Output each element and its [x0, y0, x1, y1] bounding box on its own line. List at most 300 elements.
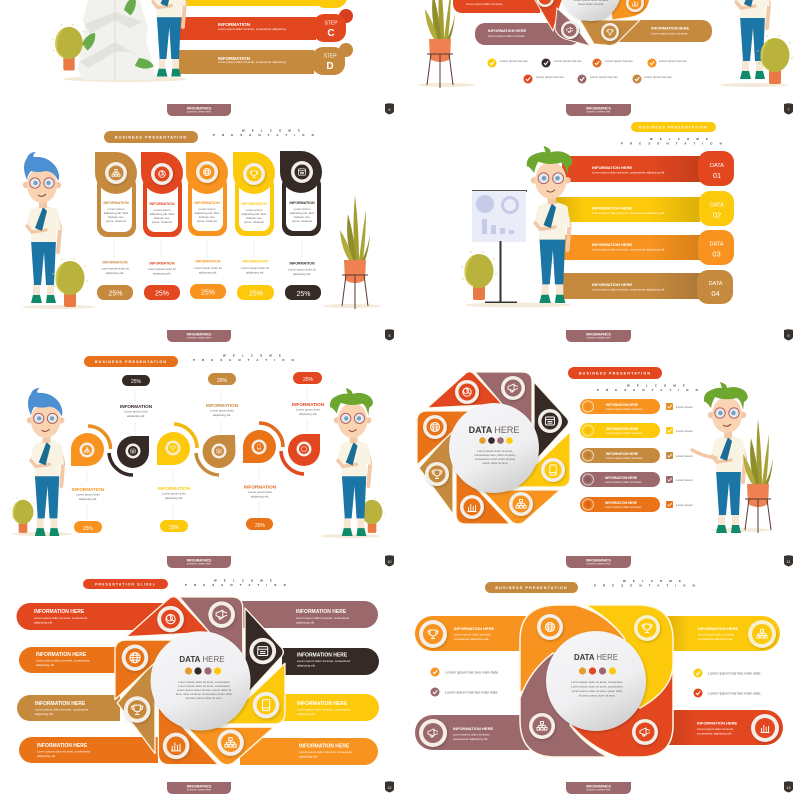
page numbers: 8 [389, 334, 391, 338]
welcome title [594, 579, 702, 588]
row 4 [580, 472, 693, 487]
row 2 [580, 423, 693, 438]
info brown [206, 403, 239, 417]
floor shadow [711, 528, 771, 532]
stat dark: INFORMATION [289, 262, 315, 266]
checklist: Lorem Ipsum has two main data [708, 692, 761, 696]
bar orange: consectetur adipiscing elit. [454, 637, 489, 641]
bar orange right: adipiscing elit. [299, 754, 318, 758]
info step D: Lorem ipsum dolor sit amet, consectetur adipiscing [218, 60, 286, 64]
data row 03 [560, 230, 734, 265]
welcome title: WELCOME [223, 354, 288, 358]
card brown: adipiscing elit. Duis [104, 211, 129, 215]
checklist: Lorem Ipsum has two [500, 59, 528, 63]
checklist [430, 668, 761, 698]
stat dark: adipiscing elit. [293, 272, 311, 276]
card dark: Lorem ipsum [294, 207, 311, 211]
badge step D [312, 43, 353, 75]
bar yellow: consectetur adipiscing elit. [698, 637, 733, 641]
badge step C: STEP [324, 20, 338, 26]
row 4: Lorem ipsum [676, 478, 693, 482]
floor shadow [63, 76, 187, 82]
data row 02: Lorem ipsum dolor sit amet, consectetur adipiscing elit. [592, 211, 665, 215]
bar icon mega [419, 719, 447, 747]
info yellow: adipiscing elit. [165, 496, 183, 500]
card brown: Lorem ipsum [108, 207, 125, 211]
icon: globe [537, 614, 563, 640]
bar orange: adipiscing elit. [36, 663, 55, 667]
drop red [281, 434, 320, 474]
footer tabs: BUSINESS COMPANY HERE [187, 110, 212, 114]
data row 02: INFORMATION HERE [592, 206, 632, 210]
bar orange: INFORMATION HERE [36, 652, 87, 658]
info brown: Lorem ipsum dolor [210, 408, 234, 412]
bar brown: adipiscing elit. [35, 712, 54, 716]
data row 01: DATA [710, 163, 724, 169]
badge step C [313, 9, 353, 42]
bar red: Lorem ipsum dolor sit amet, consectetur [34, 616, 87, 620]
bar yellow [282, 694, 379, 721]
bar orange: Lorem ipsum dolor sit amet, consectetur [36, 658, 89, 662]
stat orange: INFORMATION [195, 260, 221, 264]
disc text: ipsum dolor sit ama. [578, 2, 604, 6]
icon: trophy [634, 615, 660, 641]
info red: Lorem ipsum dolor [296, 408, 320, 412]
bar mauve: adipiscing elit. [296, 620, 315, 624]
drop dark [109, 436, 149, 475]
info step C: Lorem ipsum dolor sit amet, consectetur adipiscing [218, 27, 286, 31]
card yellow: Lorem ipsum [246, 208, 263, 212]
info step D: INFORMATION [218, 56, 251, 61]
central disc [546, 631, 646, 731]
icon: mega [632, 719, 658, 745]
info yellow [158, 486, 191, 500]
footer tabs: BUSINESS COMPANY HERE [586, 562, 611, 566]
drop yellow [157, 424, 197, 465]
page numbers: 12 [388, 786, 391, 790]
info orange: Lorem ipsum dolor [76, 492, 100, 496]
bar red [660, 710, 783, 745]
disc text: DATA HERE [179, 655, 225, 664]
footer tabs: INFOGRAPHICS [187, 332, 211, 336]
plant on stand [340, 195, 370, 309]
card orange: purus. Vivamus [197, 219, 217, 223]
stat dark [285, 262, 321, 300]
drop dark orange [243, 423, 283, 463]
checklist: Lorem Ipsum has two main data [445, 690, 498, 694]
info dark orange: Lorem ipsum dolor [248, 490, 272, 494]
footer tabs: INFOGRAPHICS [187, 558, 211, 562]
bar yellow: Lorem ipsum dolor sit amet, consectetur [297, 708, 350, 712]
info brown: Lorem ipsum dolor sit amet, [651, 32, 688, 36]
info brown [651, 26, 690, 36]
character [527, 146, 572, 303]
disc text: Lorem ipsum dolor sit amet, consectetur [571, 684, 623, 688]
icon: trophy ring [601, 23, 619, 41]
stat brown: INFORMATION [102, 260, 128, 264]
stat brown: Lorem ipsum dolor sit [101, 266, 129, 270]
data row 02 [553, 191, 734, 226]
info orange [72, 487, 105, 501]
stat orange [190, 260, 226, 299]
row 2: INFORMATION HERE [606, 427, 638, 431]
info dark orange: INFORMATION [244, 484, 277, 490]
pill heading [104, 131, 198, 143]
bar dark orange: Lorem ipsum dolor sit amet, consectetur [37, 750, 90, 754]
footer tabs: BUSINESS COMPANY HERE [187, 336, 212, 340]
floor shadow right [323, 304, 381, 308]
row 3: Lorem ipsum [676, 454, 693, 458]
disc text: DATA HERE [574, 653, 618, 662]
checklist: Lorem Ipsum has two [644, 75, 672, 79]
stat dark: 25% [296, 291, 311, 298]
data row 03: DATA [709, 242, 724, 248]
pointing arm [692, 450, 716, 458]
welcome title [213, 128, 321, 137]
presentation board [472, 190, 527, 303]
bar brown [17, 695, 120, 721]
pill heading [485, 582, 578, 593]
drop brown [196, 435, 236, 475]
card dark [280, 151, 322, 236]
page numbers: 7 [788, 108, 790, 112]
card yellow: adipiscing elit. Duis [242, 212, 267, 216]
pill heading: BUSINESS PRESENTATION [579, 372, 651, 376]
bar dark orange [19, 737, 158, 763]
row 1: Lorem ipsum dolor sit amet, [606, 407, 643, 411]
bar icon chart [751, 714, 779, 742]
bar mauve [415, 715, 535, 750]
page numbers: 11 [787, 560, 790, 564]
octagon cycle [115, 597, 285, 765]
info dark orange [244, 484, 277, 498]
footer tabs [167, 104, 631, 794]
stat red: 25% [155, 290, 169, 298]
bar brown: INFORMATION HERE [35, 701, 86, 707]
row 5: Lorem ipsum [676, 503, 693, 507]
stat brown [97, 260, 133, 300]
cactus right [359, 498, 385, 533]
data row 04: 04 [711, 289, 720, 298]
bar red: Lorem ipsum dolor sit amet, [697, 727, 734, 731]
card brown [95, 152, 137, 237]
bar red: INFORMATION HERE [697, 720, 737, 726]
row 3: Lorem ipsum dolor sit amet, [606, 456, 643, 460]
card dark: tristique nec, [294, 215, 310, 219]
disc text: sit ama. ipsum dolor sit ama. [579, 694, 616, 698]
top pill red: 25% [303, 377, 314, 383]
info dark: Lorem ipsum dolor [124, 410, 148, 414]
bar icon org [748, 620, 776, 648]
cactus [757, 35, 793, 84]
bar yellow: INFORMATION HERE [297, 701, 348, 707]
card orange: tristique nec, [199, 215, 215, 219]
welcome title: PRESENTATION [213, 133, 321, 137]
cycle segments [532, 0, 650, 46]
checklist: Lorem Ipsum has two main data [446, 670, 499, 674]
page numbers: 9 [788, 334, 790, 338]
row 2: Lorem ipsum [676, 429, 693, 433]
welcome title: PRESENTATION [621, 142, 729, 146]
bar step D [175, 50, 314, 74]
card yellow: purus. Vivamus [244, 220, 264, 224]
row 5 [580, 497, 693, 512]
row 4: INFORMATION HERE [605, 476, 637, 480]
footer tabs: INFOGRAPHICS [586, 106, 611, 110]
top pill brown: 25% [217, 378, 228, 384]
stat yellow: Lorem ipsum dolor sit [241, 266, 269, 270]
cactus [52, 258, 88, 307]
info yellow: INFORMATION [158, 486, 191, 491]
checklist: Lorem Ipsum has two [554, 59, 582, 63]
checklist: Lorem Ipsum has two main data [708, 672, 761, 676]
panel: slide 6 steps [52, 0, 353, 82]
data row 04: Lorem ipsum dolor sit amet, consectetur adipiscing elit. [592, 288, 665, 292]
bar yellow [660, 616, 780, 651]
character [728, 0, 772, 79]
character blue [27, 388, 64, 536]
disc text: Lorem ipsum dolor sit amet, consectetur [178, 680, 230, 684]
disc text: consectetur lorem dolor sit ame [475, 457, 516, 461]
floor shadow left [12, 532, 72, 536]
row 5: INFORMATION HERE [605, 501, 637, 505]
data row 03: Lorem ipsum dolor sit amet, consectetur adipiscing elit. [592, 248, 665, 252]
card red: adipiscing elit. Duis [150, 212, 175, 216]
pill heading: BUSINESS PRESENTATION [639, 126, 708, 130]
row 4: Lorem ipsum dolor sit amet, [605, 480, 642, 484]
page numbers: 13 [787, 786, 790, 790]
card red: purus. Vivamus [152, 220, 172, 224]
data row 04: INFORMATION HERE [592, 282, 632, 287]
paper pile [78, 0, 156, 80]
bar mauve: INFORMATION HERE [296, 609, 347, 615]
pill heading: BUSINESS PRESENTATION [115, 136, 187, 140]
panel: slide 10 timeline [10, 354, 385, 538]
row 3: INFORMATION HERE [606, 452, 638, 456]
text red: Lorem ipsum dolor sit amet, [466, 2, 503, 6]
row 1: INFORMATION HERE [606, 403, 638, 407]
pill heading [83, 579, 168, 589]
stat orange: Lorem ipsum dolor sit [194, 266, 222, 270]
card yellow: tristique nec, [246, 216, 262, 220]
info orange: INFORMATION [72, 487, 105, 492]
floor shadow right [720, 83, 788, 87]
card red [141, 152, 183, 237]
stat red: INFORMATION [149, 262, 175, 266]
disc text: Lorem ipsum dolor sit amet, [477, 449, 513, 453]
floor shadow [22, 305, 96, 309]
data row 01: INFORMATION HERE [592, 165, 632, 170]
stat dark: Lorem ipsum dolor sit [288, 268, 316, 272]
info dark: adipiscing elit. [127, 414, 145, 418]
card orange: adipiscing elit. Duis [195, 211, 220, 215]
stat red: adipiscing elit. [153, 272, 171, 276]
pill heading [568, 367, 662, 379]
info red: adipiscing elit. [299, 412, 317, 416]
panel: slide 8 cards [22, 128, 381, 309]
data row 04: DATA [708, 281, 723, 287]
bottom pill yellow [160, 520, 188, 532]
info yellow: Lorem ipsum dolor [162, 492, 186, 496]
welcome title: PRESENTATION [597, 388, 705, 392]
bar mauve: INFORMATION HERE [453, 726, 493, 731]
bar brown [600, 20, 712, 42]
info dark orange: adipiscing elit. [251, 494, 269, 498]
icon: mega ring [561, 21, 579, 39]
bottom pill orange [74, 521, 102, 533]
checklist [488, 58, 687, 84]
panel: slide 12 octagon with bars [17, 578, 379, 765]
bottom pill dark orange [246, 518, 273, 530]
data row 01: Lorem ipsum dolor sit amet, consectetur adipiscing elit. [592, 170, 665, 174]
panel: slide 13 swirl [415, 579, 783, 757]
bar red: consectetur adipiscing elit. [697, 732, 732, 736]
footer tabs: INFOGRAPHICS [586, 332, 611, 336]
data row 03: INFORMATION HERE [592, 242, 632, 247]
welcome title [185, 578, 293, 587]
checklist: Lorem Ipsum has two [536, 75, 564, 79]
footer tabs: INFOGRAPHICS [187, 106, 211, 110]
bar yellow: adipiscing elit. [297, 712, 316, 716]
info dark: INFORMATION [120, 404, 153, 409]
info red [292, 402, 325, 416]
info mauve: INFORMATION HERE [488, 29, 527, 33]
page numbers [385, 103, 793, 792]
bar dark: adipiscing elit. [297, 664, 316, 668]
floor shadow right [320, 534, 380, 538]
footer tabs: BUSINESS COMPANY HERE [586, 788, 611, 792]
card red: Lorem ipsum [154, 208, 171, 212]
info red: INFORMATION [292, 402, 325, 407]
data row 02: DATA [710, 202, 724, 208]
welcome title: WELCOME [242, 128, 307, 132]
stat yellow: 25% [249, 290, 263, 298]
welcome title [193, 354, 301, 362]
disc text: Lorem ipsum dolor sit amet, consectetur [178, 684, 230, 688]
disc text: ipsum dolor sit ame [482, 461, 508, 465]
top pill red [293, 372, 322, 384]
bar mauve: Lorem ipsum dolor sit amet, consectetur [296, 616, 349, 620]
badge step D: STEP [323, 54, 337, 60]
info step D [218, 56, 286, 64]
bar dark [282, 648, 379, 675]
disc text [469, 425, 519, 465]
disc text [571, 653, 623, 698]
top pill dark [122, 375, 150, 386]
step yellow badge [314, 0, 347, 8]
welcome title: WELCOME [623, 579, 688, 583]
welcome title: PRESENTATION [193, 358, 301, 362]
row 1: Lorem ipsum [676, 405, 693, 409]
card yellow: INFORMATION [241, 202, 267, 206]
bar red: INFORMATION HERE [34, 609, 85, 615]
row 1 [580, 399, 693, 414]
data row 01: 01 [713, 171, 721, 180]
bar mauve [475, 23, 580, 45]
stat brown: 25% [108, 290, 123, 298]
footer tabs: BUSINESS COMPANY HERE [586, 336, 611, 340]
data row 01 [562, 151, 734, 186]
bar orange: INFORMATION HERE [454, 626, 494, 631]
footer tabs: INFOGRAPHICS [586, 784, 611, 788]
welcome title [597, 384, 705, 392]
icon: chart ring [626, 0, 644, 12]
stat yellow: INFORMATION [242, 260, 268, 264]
checklist: Lorem Ipsum has two [605, 59, 633, 63]
pill heading: PRESENTATION SLIDEs [95, 582, 156, 586]
welcome title: PRESENTATION [185, 583, 293, 587]
disc text: DATA HERE [469, 425, 519, 435]
floor shadow [417, 83, 475, 87]
info orange: adipiscing elit. [79, 497, 97, 501]
welcome title: WELCOME [650, 137, 715, 141]
bar mauve [240, 601, 378, 628]
disc text: Lorem ipsum dolor sit ama. ipsum dolor [572, 689, 622, 693]
icon: money leaves [80, 0, 154, 75]
page numbers: 10 [388, 560, 391, 564]
disc text: sit ame, ipsum dolor sit ame. [186, 696, 223, 700]
character blue [23, 152, 61, 303]
data row 02: 02 [713, 210, 721, 220]
stat yellow: adipiscing elit. [246, 270, 264, 274]
footer tabs: BUSINESS COMPANY HERE [187, 562, 212, 566]
page numbers: 6 [389, 108, 391, 112]
footer tabs: BUSINESS COMPANY HERE [586, 110, 611, 114]
welcome title: PRESENTATION [594, 584, 702, 588]
drop orange [71, 426, 110, 466]
stat orange: adipiscing elit. [199, 270, 217, 274]
disc text [574, 0, 609, 6]
data row 04 [558, 270, 733, 304]
info dark [120, 404, 153, 418]
central disc [561, 0, 621, 21]
footer tabs: BUSINESS COMPANY HERE [187, 788, 212, 792]
bottom pill dark orange: 25% [255, 523, 266, 529]
stat red [144, 262, 180, 300]
bar dark orange: adipiscing elit. [37, 754, 56, 758]
cactus [461, 251, 497, 300]
info brown: INFORMATION HERE [651, 26, 690, 30]
card dark: INFORMATION [289, 201, 315, 205]
bar dark: INFORMATION HERE [297, 652, 348, 658]
character green [704, 382, 748, 533]
card brown: purus. Vivamus [106, 219, 126, 223]
bar orange [19, 647, 120, 673]
disc text: Lorem ipsum dolor sit amet, consectetur [571, 680, 623, 684]
card orange: Lorem ipsum [199, 207, 216, 211]
top pill dark: 25% [131, 379, 142, 385]
info brown: INFORMATION [206, 403, 239, 408]
info mauve [488, 29, 527, 38]
bar dark: Lorem ipsum dolor sit amet, consectetur [297, 659, 350, 663]
data row 03: 03 [712, 250, 721, 258]
cactus [52, 24, 86, 71]
bar yellow: Lorem ipsum dolor sit amet, [698, 632, 735, 636]
panel: slide 11 octagon [417, 367, 773, 533]
checklist: Lorem Ipsum has two [590, 75, 618, 79]
bar orange right [240, 738, 378, 765]
row 3 [580, 448, 693, 463]
octagon cycle [417, 372, 570, 524]
info step C: INFORMATION [218, 22, 251, 27]
bar icon trophy [419, 620, 447, 648]
bar step C [175, 17, 316, 40]
disc text: ame, dolor sit amet, consectetur lorem dolor [176, 692, 232, 696]
card red: tristique nec, [154, 216, 170, 220]
pill heading: BUSINESS PRESENTATION [495, 586, 568, 590]
card orange: INFORMATION [194, 201, 220, 205]
swirl segments [520, 605, 673, 757]
